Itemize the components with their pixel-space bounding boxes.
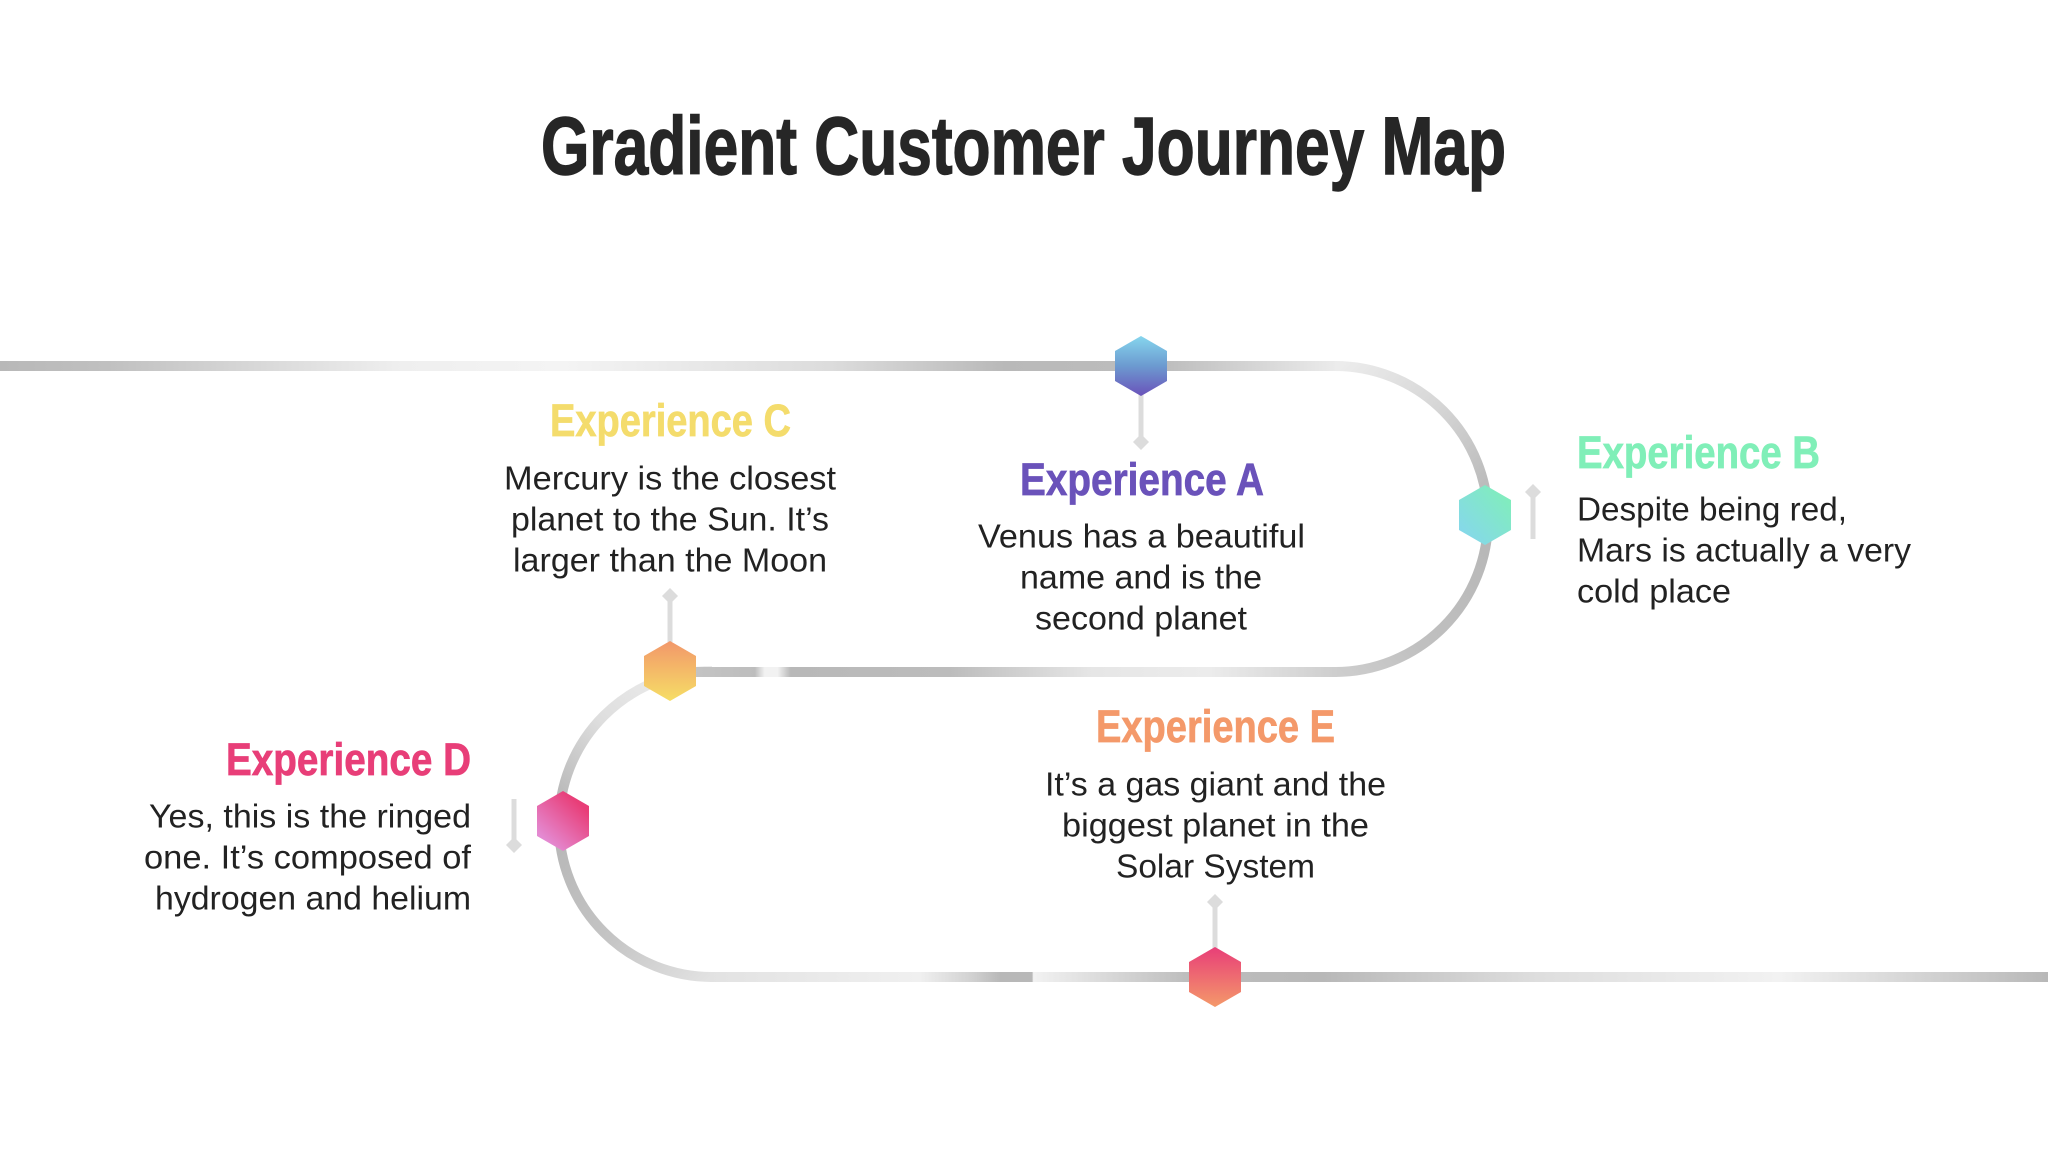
experience D text: Yes, this is the ringed [149, 798, 471, 834]
connector B [1525, 484, 1541, 539]
experience A text [978, 518, 1305, 636]
experience C heading: Experience C [550, 395, 791, 446]
experience E text: biggest planet in the [1062, 806, 1369, 844]
experience C text [504, 460, 836, 578]
experience D text: hydrogen and helium [155, 880, 471, 916]
experience E text: It’s a gas giant and the [1045, 766, 1386, 802]
experience A text: name and is the [1020, 558, 1262, 596]
experience B text: Despite being red, [1577, 490, 1847, 528]
experience D heading: Experience D [226, 734, 471, 785]
experience B heading: Experience B [1577, 427, 1820, 478]
experience A heading: Experience A [1020, 454, 1264, 505]
experience E text: Solar System [1116, 848, 1315, 884]
hexagon D [537, 791, 589, 851]
experience B text: cold place [1577, 572, 1731, 610]
experience B text: Mars is actually a very [1577, 532, 1911, 568]
experience C text: planet to the Sun. It’s [511, 500, 829, 538]
experience C text: Mercury is the closest [504, 460, 836, 496]
experience D text [144, 798, 472, 916]
hexagon A [1115, 336, 1167, 396]
hexagon C [644, 641, 696, 701]
experience A text: Venus has a beautiful [978, 518, 1305, 554]
journey track [0, 366, 2048, 977]
experience B text [1577, 490, 1911, 610]
experience D text: one. It’s composed of [144, 838, 472, 876]
experience C text: larger than the Moon [513, 542, 827, 578]
experience A text: second planet [1035, 600, 1247, 636]
experience E heading: Experience E [1096, 701, 1335, 752]
connector E [1207, 894, 1223, 949]
connector A [1133, 389, 1149, 450]
hexagon B [1459, 485, 1511, 545]
hexagon E [1189, 947, 1241, 1007]
connector D [506, 799, 522, 853]
title: Gradient Customer Journey Map [541, 101, 1506, 192]
experience E text [1045, 766, 1386, 884]
connector C [662, 588, 678, 642]
